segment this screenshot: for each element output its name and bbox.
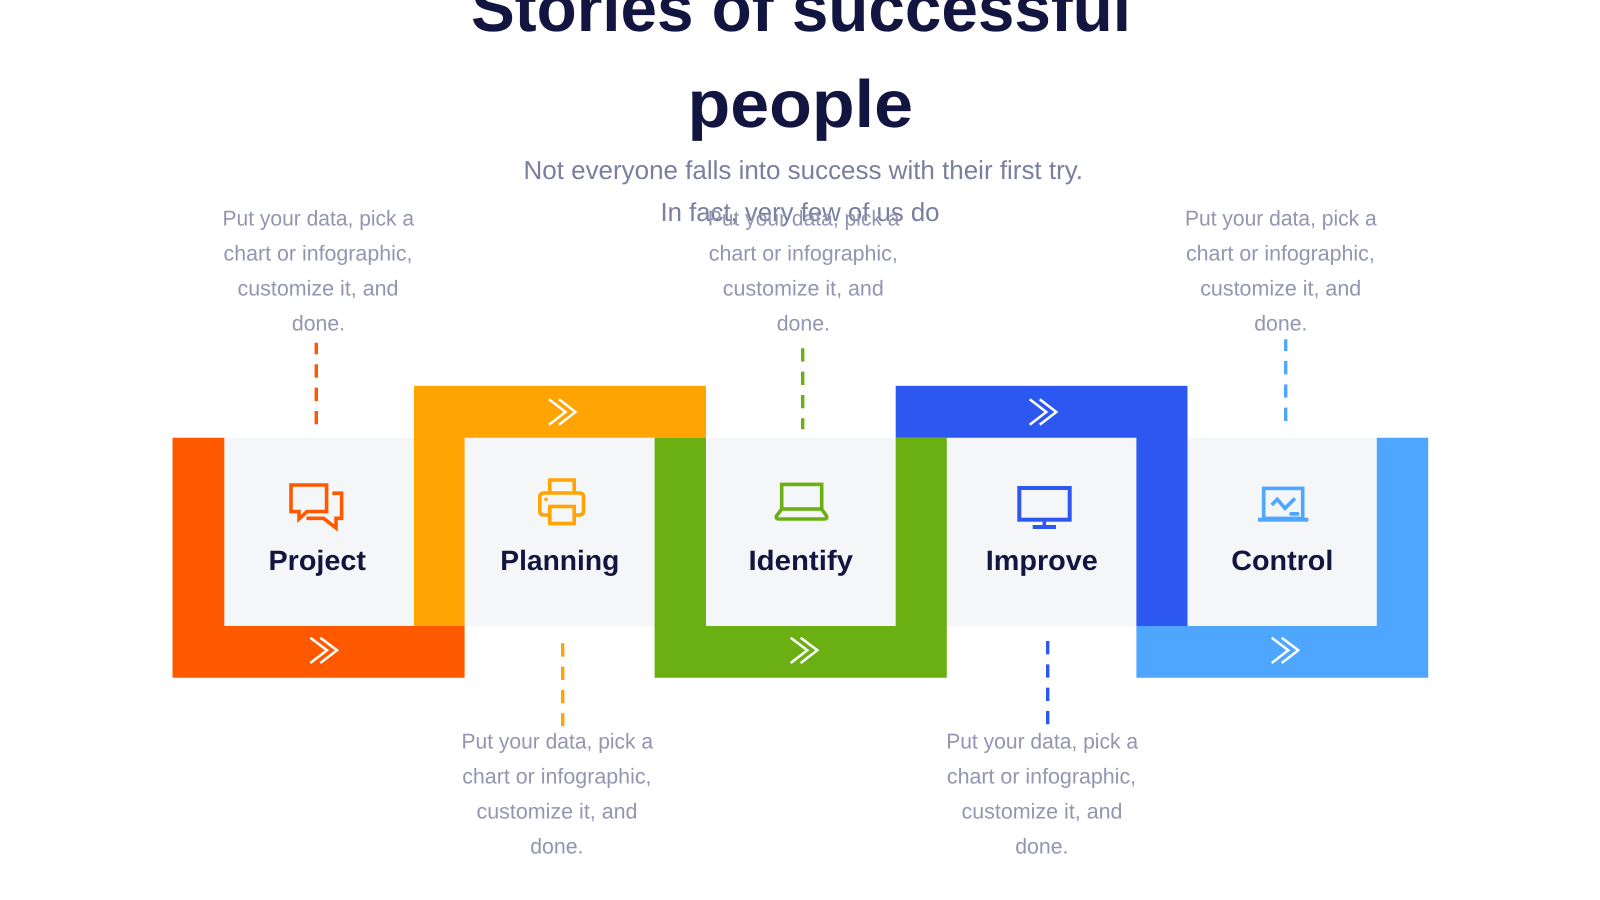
panel: improve: [896, 386, 1188, 858]
subtitle: [524, 155, 1083, 227]
label: project: Project: [268, 545, 366, 576]
text block: planning description: [462, 730, 653, 858]
label: identify: Identify: [748, 545, 853, 576]
text block: control description: [1185, 206, 1377, 336]
label: control: Control: [1231, 545, 1333, 576]
arrow: planning chevrons: [549, 399, 576, 425]
title: people: [688, 67, 913, 142]
panel: grey process band: [224, 438, 1377, 626]
title: [471, 0, 1131, 142]
text block: identify description: chart or infographic,: [709, 242, 898, 266]
icon: laptop: [776, 484, 827, 519]
subtitle: In fact, very few of us do: [660, 197, 940, 227]
label: improve: Improve: [986, 545, 1098, 576]
panel: identify: [655, 206, 947, 678]
text block: planning description: Put your data, pick a: [462, 730, 653, 754]
label: planning: Planning: [500, 545, 619, 576]
dashed leader: identify: [801, 348, 804, 429]
text block: improve description: customize it, and: [962, 800, 1122, 824]
text block: identify description: customize it, and: [723, 276, 884, 300]
text block: project description: Put your data, pick a: [222, 206, 414, 230]
arrow: identify chevrons: [791, 638, 817, 663]
text block: planning description: done.: [530, 834, 584, 858]
panel: planning: [414, 386, 706, 858]
text block: control description: chart or infographic,: [1186, 242, 1375, 266]
text block: identify description: done.: [777, 312, 830, 336]
text block: project description: customize it, and: [238, 276, 398, 300]
connector: green: [655, 438, 947, 678]
text block: improve description: [946, 730, 1138, 858]
icon: presentation board: [1258, 488, 1308, 522]
text block: improve description: chart or infographic,: [947, 764, 1136, 788]
icon: printer: [540, 480, 584, 524]
connector: amber: [414, 386, 706, 626]
text block: project description: done.: [292, 312, 345, 336]
dashed leader: project: [315, 343, 318, 424]
arrow: control chevrons: [1272, 638, 1298, 663]
panel: project: [172, 206, 465, 678]
connector: light blue: [1136, 438, 1428, 678]
text block: control description: done.: [1254, 312, 1308, 336]
subtitle: Not everyone falls into success with their first try.: [524, 155, 1083, 185]
text block: improve description: done.: [1015, 834, 1068, 858]
text block: improve description: Put your data, pick a: [946, 730, 1138, 754]
icon: monitor: [1019, 488, 1070, 529]
text block: planning description: customize it, and: [476, 800, 638, 824]
connector: orange: [172, 438, 465, 678]
arrow: improve chevrons: [1030, 399, 1056, 425]
icon: chat bubbles: [291, 485, 342, 528]
text block: identify description: Put your data, pick a: [708, 206, 899, 230]
dashed leader: improve: [1046, 641, 1049, 724]
text block: control description: Put your data, pick a: [1185, 206, 1377, 230]
text block: planning description: chart or infographic,: [462, 764, 652, 788]
panel: control: [1136, 206, 1428, 678]
dashed leader: control: [1284, 339, 1287, 421]
arrow: project chevrons: [310, 638, 337, 663]
connector: blue: [896, 386, 1188, 626]
text block: project description: [222, 206, 414, 336]
text block: control description: customize it, and: [1200, 276, 1361, 300]
text block: project description: chart or infographic,: [224, 242, 412, 266]
dashed leader: planning: [561, 643, 564, 726]
text block: identify description: [708, 206, 899, 336]
